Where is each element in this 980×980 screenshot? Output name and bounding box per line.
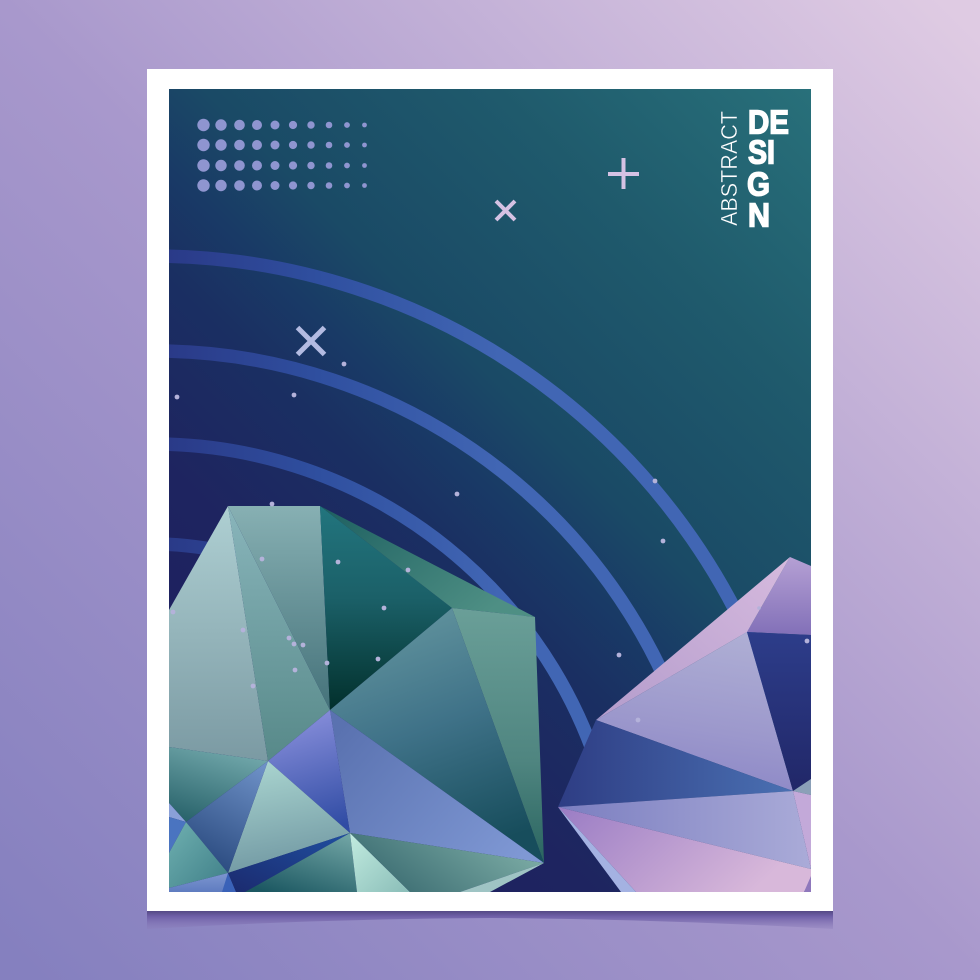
facet: bottom teal bbox=[245, 833, 357, 892]
icon: large cross mark bbox=[298, 328, 324, 354]
facet: pale sliver bbox=[460, 863, 544, 892]
artwork background gradient bbox=[169, 89, 811, 892]
facet: blue left bbox=[186, 761, 268, 873]
facet: blue lower right bbox=[330, 710, 544, 863]
facet: right side bbox=[452, 608, 544, 863]
title: abstract design bbox=[721, 110, 788, 228]
facet: top purple bbox=[747, 557, 811, 635]
purple crystal bbox=[558, 557, 811, 892]
facet: large center bbox=[330, 608, 544, 863]
title word: design: N bbox=[748, 198, 770, 234]
poster artwork bbox=[155, 89, 811, 892]
halftone dot grid bbox=[197, 119, 367, 192]
title word: design bbox=[748, 110, 788, 228]
facet: left ridge bbox=[228, 506, 330, 761]
facet: pale lower bbox=[228, 761, 350, 873]
icon: plus mark bbox=[608, 158, 639, 189]
facet: dark navy bbox=[747, 632, 811, 791]
facet: bottom left blue bbox=[169, 873, 236, 892]
facet: lower lavender bbox=[558, 791, 811, 869]
icon: small cross mark bbox=[496, 201, 515, 220]
facet: dark teal bbox=[320, 506, 452, 710]
facet: pink right bbox=[793, 791, 811, 869]
facet: teal left bbox=[169, 747, 268, 822]
facet: small saturated blue bbox=[222, 873, 236, 892]
title word: abstract: ABSTRACT bbox=[716, 111, 742, 226]
facet: saturated blue bbox=[268, 710, 350, 833]
title word: design: G bbox=[747, 166, 770, 204]
title word: design: SI bbox=[748, 134, 775, 172]
facet: blue band bbox=[558, 720, 793, 807]
scattered small dots bbox=[171, 362, 809, 722]
facet: small blue corner bbox=[169, 817, 186, 853]
facet: bottom pink bbox=[558, 807, 811, 892]
facet: upper left light bbox=[169, 506, 268, 761]
facet: edge sliver bbox=[558, 807, 636, 892]
teal crystal bbox=[169, 506, 544, 892]
concentric arcs bbox=[155, 256, 780, 810]
facet: pale blue corner bbox=[169, 803, 186, 822]
facet: dark blue wedge bbox=[228, 833, 350, 892]
facet: teal corner bbox=[169, 822, 228, 888]
facet: corner purple bbox=[804, 876, 811, 892]
facet: bottom right teal bbox=[350, 833, 544, 892]
white poster card bbox=[147, 69, 833, 911]
facet: pink sliver bbox=[596, 557, 790, 720]
facet: large lavender bbox=[596, 632, 793, 791]
facet: green top right bbox=[320, 506, 535, 617]
facet: top bbox=[228, 506, 330, 710]
facet: pale mint bbox=[350, 833, 410, 892]
facet: grey blue bbox=[793, 779, 811, 795]
poster drop shadow bbox=[147, 911, 833, 929]
title word: design: DE bbox=[748, 104, 789, 142]
